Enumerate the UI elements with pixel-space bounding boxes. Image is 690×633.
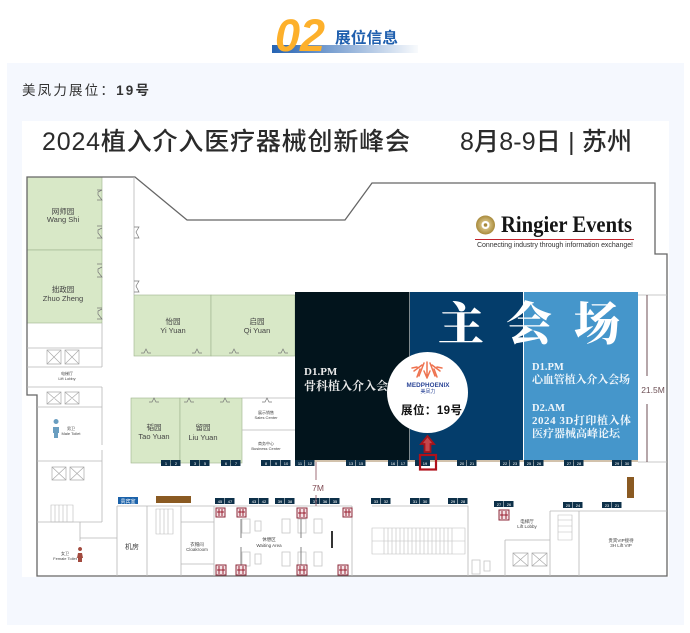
room: Lift Lobby east: Lift Lobby [517, 524, 538, 529]
D2 subject: 2024 3D打印植入体 [532, 413, 631, 427]
booth row upper numbers: 7 [235, 461, 238, 466]
room: Qi Yuan: Qi Yuan [244, 326, 270, 335]
room: Zhuo Zheng [43, 284, 83, 303]
interior walls [27, 177, 667, 576]
room: Waiting Area [256, 536, 282, 548]
room: Lift Lobby: 电梯厅 [61, 370, 73, 376]
booth row lower numbers: 29 [451, 499, 456, 504]
escalators [372, 528, 465, 554]
floor plan title: 2024植入介入医疗器械创新峰会 [42, 128, 410, 156]
sign: blue info board: 贵宾室 [120, 498, 136, 505]
logo rule [475, 239, 634, 240]
room: Cloakroom: Cloakroom [186, 547, 208, 552]
room: Cloakroom [186, 541, 208, 552]
D1 subject: 心血管植入介入会场 [532, 372, 630, 386]
room: Yi Yuan [160, 316, 186, 335]
room: Business Center [251, 440, 281, 451]
room labels [43, 206, 634, 561]
booth row lower [215, 498, 622, 508]
callout circle [387, 352, 468, 433]
room: Liu Yuan: Liu Yuan [188, 433, 218, 442]
hall subject: 骨科植入介入会 [304, 378, 388, 393]
waiting area furniture [242, 519, 490, 574]
D2 label: D2.AM [532, 403, 565, 414]
booth row upper numbers: 30 [625, 461, 630, 466]
booth row lower numbers: 25 [566, 503, 571, 508]
booth row upper numbers: 20 [460, 461, 465, 466]
room: Waiting Area: 休憩区 [262, 536, 276, 543]
room: Waiting Area: Waiting Area [256, 543, 282, 548]
board background [22, 121, 669, 577]
room: Tao Yuan: 韬园 [146, 422, 162, 432]
room: Wang Shi [47, 206, 79, 224]
D1 label: D1.PM [532, 362, 564, 373]
room: 3H Lift VIP: 3H Lift VIP [610, 543, 632, 548]
room: Sales Center [254, 409, 278, 420]
icon: female toilet [77, 547, 83, 562]
icon: male toilet [53, 419, 59, 438]
section title: 展位信息 [335, 28, 398, 47]
logo wordmark: Ringier Events [501, 212, 632, 237]
booth row lower numbers: 28 [461, 499, 466, 504]
booth row upper numbers: 16 [391, 461, 396, 466]
hall label: D1.PM [304, 366, 338, 378]
booth row upper numbers: 23 [513, 461, 518, 466]
booth row lower numbers: 42 [262, 499, 267, 504]
section heading [272, 10, 418, 61]
booth row lower numbers: 39 [278, 499, 283, 504]
section number: 02 [275, 10, 325, 61]
arrow to booth [421, 436, 434, 452]
booth row lower numbers: 35 [333, 499, 338, 504]
hall: cardiovascular [524, 292, 638, 460]
company name: MEDPHOENIX [406, 382, 450, 389]
room: Female Toilet [53, 550, 78, 561]
booth row lower numbers: 24 [576, 503, 581, 508]
icon: phoenix logo [412, 362, 442, 378]
room: Female Toilet: Female Toilet [53, 556, 78, 561]
floor plan board [22, 121, 669, 577]
booth row upper numbers: 17 [401, 461, 406, 466]
restroom sign figures [217, 509, 508, 574]
logo mark [476, 216, 495, 234]
main venue title: 主 会 场 [438, 299, 620, 350]
booth row upper numbers: 10 [284, 461, 289, 466]
room: Yi Yuan: Yi Yuan [160, 326, 186, 335]
booth row upper numbers: 6 [225, 461, 228, 466]
booth row lower numbers: 37 [313, 499, 318, 504]
booth row upper numbers: 29 [615, 461, 620, 466]
room: Machine room: 机房 [125, 542, 139, 551]
dimension: 7M [312, 462, 324, 506]
waiting area partitions [241, 519, 301, 566]
callout: Medphoenix booth [387, 352, 468, 433]
hall: bone implant [295, 292, 410, 460]
elevators [47, 350, 547, 566]
booth number: 展位：19号 [401, 403, 462, 417]
booth row lower numbers: 47 [228, 499, 233, 504]
booth row lower numbers: 33 [374, 499, 379, 504]
booth row lower numbers: 38 [288, 499, 293, 504]
sign: brown vertical board [627, 477, 634, 498]
booth row upper numbers: 19 [423, 461, 428, 466]
room: 3H Lift VIP [608, 537, 634, 548]
booth row upper numbers: 15 [359, 461, 364, 466]
room: Qi Yuan [244, 316, 270, 335]
room: Lift Lobby east [517, 518, 538, 529]
hall: main venue [410, 292, 523, 460]
room: Business Center: 商务中心 [258, 440, 274, 446]
room: Lift Lobby: Lift Lobby [58, 376, 76, 381]
booth row lower numbers: 32 [384, 499, 389, 504]
room: Lift Lobby [58, 370, 76, 381]
room: Zhuo Zheng: 拙政园 [52, 284, 74, 294]
room: Sales Center: 展示销售 [258, 409, 274, 415]
dimension: 7M: 7M [312, 483, 324, 493]
booth row upper numbers: 11 [298, 461, 303, 466]
floor plan date and city: 8月8-9日 | 苏州 [460, 128, 632, 156]
booth row upper [161, 460, 632, 466]
room: Liu Yuan [188, 422, 218, 442]
hall background [524, 292, 638, 460]
booth row lower numbers: 43 [252, 499, 257, 504]
room: Zhuo Zheng: Zhuo Zheng [43, 294, 83, 303]
booth row upper numbers [165, 461, 630, 466]
booth row upper numbers: 28 [577, 461, 582, 466]
room: Male Toilet: Male Toilet [61, 431, 81, 436]
booth row upper numbers: 5 [204, 461, 207, 466]
booth row upper numbers: 25 [527, 461, 532, 466]
booth row upper numbers: 26 [537, 461, 542, 466]
booth row upper numbers: 12 [308, 461, 313, 466]
room: Lift Lobby east: 电梯厅 [520, 518, 534, 525]
D2 subject line 2: 医疗器械高峰论坛 [532, 426, 621, 440]
booth row upper numbers: 9 [275, 461, 278, 466]
room: Business Center: Business Center [251, 446, 281, 451]
room: 3H Lift VIP: 贵宾VIP接待 [608, 537, 634, 544]
waiting area screen [331, 531, 333, 548]
green meeting rooms [27, 177, 295, 463]
room: Yi Yuan: 怡园 [166, 316, 180, 326]
room: Wang Shi: 网师园 [52, 206, 74, 216]
booth row upper numbers: 8 [265, 461, 268, 466]
room: Female Toilet: 女卫 [61, 550, 69, 556]
booth row lower numbers [218, 499, 620, 508]
booth row upper numbers: 21 [470, 461, 475, 466]
dimension: 21.5M: 21.5M [641, 385, 665, 395]
booth row upper numbers: 1 [165, 461, 168, 466]
company Chinese name: 美凤力 [420, 388, 436, 395]
room: Male Toilet [61, 426, 81, 436]
room: Sales Center: Sales Center [254, 415, 278, 420]
sign: brown board [156, 496, 191, 503]
room: Liu Yuan: 留园 [196, 422, 210, 432]
booth row upper numbers: 2 [175, 461, 178, 466]
room: Qi Yuan: 启园 [250, 316, 264, 326]
booth row lower numbers: 36 [323, 499, 328, 504]
booth row upper numbers: 27 [567, 461, 572, 466]
doors [97, 190, 607, 459]
booth row lower numbers: 31 [413, 499, 418, 504]
logo: Ringier Events [475, 212, 634, 249]
hall background [295, 292, 410, 460]
booth row lower numbers: 27 [497, 502, 502, 507]
booth label: 美凤力展位：19号 [22, 83, 149, 98]
booth 19 highlight [420, 455, 436, 470]
building outer wall [27, 177, 667, 576]
booth row upper numbers: 3 [194, 461, 197, 466]
room: Tao Yuan [138, 422, 170, 441]
sign: blue info board [118, 497, 138, 505]
booth row lower numbers: 23 [605, 503, 610, 508]
room: Tao Yuan: Tao Yuan [138, 432, 170, 441]
room: Male Toilet: 男卫 [67, 426, 75, 431]
room: Wang Shi: Wang Shi [47, 215, 79, 224]
booth row lower numbers: 26 [507, 502, 512, 507]
booth row upper numbers: 22 [503, 461, 508, 466]
booth row lower numbers: 21 [615, 503, 620, 508]
stair blocks [51, 505, 572, 540]
logo tagline: Connecting industry through information exchange! [477, 242, 633, 249]
room: Cloakroom: 衣帽间 [190, 541, 204, 548]
booth row lower numbers: 45 [218, 499, 223, 504]
heading gradient bar [272, 45, 418, 53]
booth row upper numbers: 13 [349, 461, 354, 466]
booth row lower numbers: 30 [423, 499, 428, 504]
restroom signs [216, 508, 509, 575]
corridor edge [295, 460, 638, 462]
